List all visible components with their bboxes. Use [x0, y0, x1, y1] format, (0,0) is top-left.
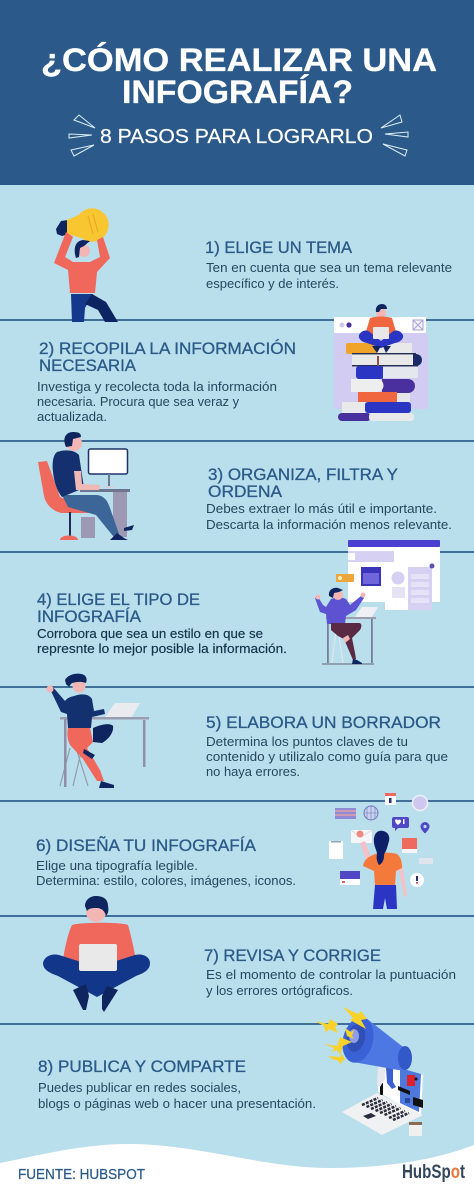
heading: 4) ELIGE EL TIPO DE	[37, 590, 200, 609]
step 1 illustration: person lifting bulb	[54, 208, 118, 322]
person	[359, 304, 403, 353]
keyboard	[362, 1098, 409, 1120]
body: Es el momento de controlar la puntuación	[206, 968, 456, 982]
title	[41, 42, 437, 110]
body: no haya errores.	[206, 765, 300, 779]
step 5 text	[206, 713, 448, 779]
body: represnte lo mejor posible la información.	[37, 642, 287, 656]
body: y los errores ortógraficos.	[206, 984, 353, 998]
header panel	[0, 0, 474, 185]
heading: NECESARIA	[39, 356, 137, 375]
body: Ten en cuenta que sea un tema relevante	[206, 261, 452, 275]
step 8 text	[38, 1057, 316, 1111]
body: blogs o páginas web o hacer una presentación.	[38, 1097, 316, 1111]
heading: 7) REVISA Y CORRIGE	[204, 946, 381, 965]
footer wave	[0, 1144, 474, 1185]
step 7 illustration: person with laptop	[43, 896, 150, 1012]
lightning bolts	[315, 1007, 367, 1064]
heading	[208, 465, 398, 501]
woman	[360, 831, 407, 909]
body	[37, 627, 287, 656]
step 6 text	[36, 836, 296, 888]
step 2 illustration: person on books	[334, 304, 428, 421]
heading: 8) PUBLICA Y COMPARTE	[38, 1057, 246, 1076]
step 5 illustration: woman at desk	[46, 674, 149, 788]
title: ¿CÓMO REALIZAR UNA	[41, 42, 437, 78]
body	[36, 859, 296, 888]
step 7 text	[204, 946, 456, 998]
step 2 text	[37, 339, 296, 424]
body: Descarta la información menos relevante.	[206, 518, 452, 532]
body: necesaria. Procura que sea veraz y	[37, 395, 240, 409]
books	[338, 343, 422, 421]
body	[206, 261, 452, 291]
subtitle: 8 PASOS PARA LOGRARLO	[100, 125, 373, 148]
icon: left rays	[69, 115, 95, 156]
body	[206, 502, 452, 532]
body: Determina: estilo, colores, imágenes, iconos.	[36, 874, 296, 888]
step 3 text	[206, 465, 452, 532]
step 6 illustration: woman with floating icons	[329, 793, 433, 909]
heading	[39, 339, 296, 375]
body: contenido y utilizalo como guía para que	[206, 750, 448, 764]
body	[206, 968, 456, 998]
heading: INFOGRAFÍA	[37, 607, 142, 626]
body: Elige una tipografía legible.	[36, 859, 198, 873]
body	[206, 735, 448, 779]
heading: 5) ELABORA UN BORRADOR	[206, 713, 441, 732]
body: Debes extraer lo más útil e importante.	[206, 502, 437, 516]
logo: HubSpot: HubSpot	[402, 1162, 466, 1183]
title: INFOGRAFÍA?	[122, 74, 353, 110]
monitor	[88, 449, 128, 488]
icon: right rays	[381, 115, 408, 156]
browser window	[336, 540, 440, 610]
step 4 text	[37, 590, 287, 656]
body: Determina los puntos claves de tu	[206, 735, 408, 749]
megaphone	[338, 1014, 412, 1089]
body: actualizada.	[37, 410, 107, 424]
step 1 text	[205, 238, 452, 291]
body: Investiga y recolecta toda la información	[37, 380, 277, 394]
laptop	[342, 1065, 423, 1136]
step 4 illustration: browser and person	[315, 540, 440, 665]
heading	[37, 590, 200, 626]
heading: ORDENA	[208, 482, 283, 501]
body	[37, 380, 277, 424]
floating icons	[329, 793, 433, 887]
body	[38, 1081, 316, 1111]
body: Puedes publicar en redes sociales,	[38, 1081, 241, 1095]
person	[315, 588, 378, 665]
heading: 3) ORGANIZA, FILTRA Y	[208, 465, 398, 484]
heading: 2) RECOPILA LA INFORMACIÓN	[39, 339, 296, 358]
heading: 6) DISEÑA TU INFOGRAFÍA	[36, 836, 257, 855]
heading: 1) ELIGE UN TEMA	[205, 238, 353, 257]
body: específico y de interés.	[206, 277, 339, 291]
step 8 illustration: megaphone and laptop	[315, 1007, 423, 1136]
footer source: FUENTE: HUBSPOT	[18, 1166, 145, 1183]
step 3 illustration: person at computer	[38, 432, 134, 540]
body: Corrobora que sea un estilo en que se	[37, 627, 263, 641]
